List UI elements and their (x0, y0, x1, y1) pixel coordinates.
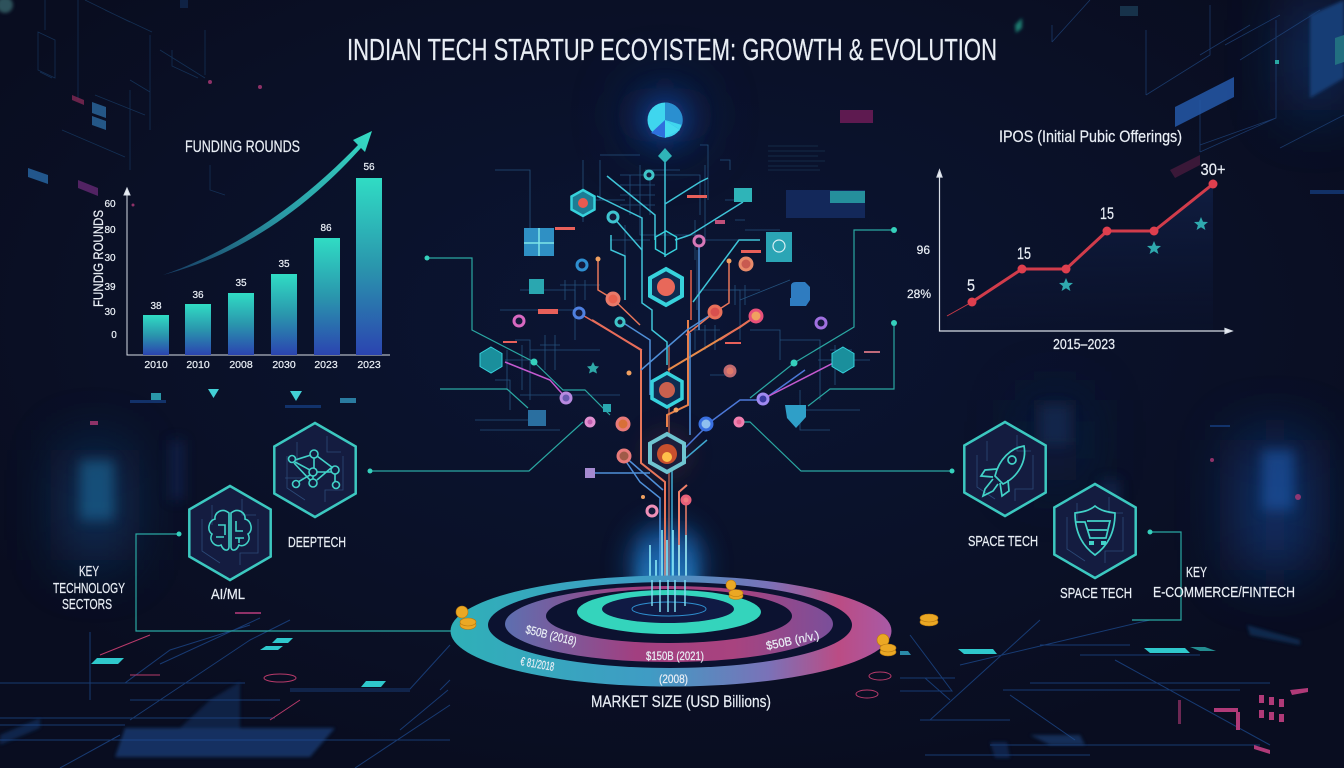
label Space Tech: SPACE TECH (968, 533, 1038, 550)
inner teal ring (577, 590, 761, 634)
IPO y ticks (907, 243, 931, 301)
ring values (524, 622, 820, 663)
panel: market size rings (450, 576, 938, 711)
panel: sector Space Tech (964, 422, 1046, 550)
label AI/ML: AI/ML (211, 586, 245, 603)
funding y ticks: 0 (111, 330, 117, 341)
funding years: 2010 (144, 359, 168, 371)
tree small labels (503, 195, 880, 353)
hexagon rocket (964, 422, 1046, 516)
IPO line (947, 180, 1218, 316)
funding years: 2023 (314, 359, 338, 371)
coin stacks (456, 580, 938, 656)
hexagon DeepTech (274, 423, 356, 517)
funding bar values: 36 (192, 290, 204, 301)
tree square icons (524, 110, 873, 478)
tree hexagons (480, 190, 854, 472)
IPO values: 15 (1100, 204, 1114, 223)
outer ring values: (2008) (659, 672, 688, 686)
funding y ticks: 30 (104, 307, 116, 318)
icon: diamond (658, 148, 672, 163)
side specks (90, 80, 1301, 614)
IPO x label: 2015–2023 (1053, 336, 1115, 353)
funding y ticks: 30 (104, 253, 116, 264)
label: key technology sectors: TECHNOLOGY (53, 580, 125, 597)
panel: circuit tree (136, 98, 1181, 631)
tree trunk lines (505, 245, 843, 600)
connector dots (176, 227, 1152, 536)
label: key e-commerce/fintech: KEY (1186, 564, 1207, 581)
IPO values: 30+ (1200, 160, 1226, 179)
funding years (144, 359, 381, 371)
label: key technology sectors (53, 563, 125, 613)
funding bar values: 56 (363, 162, 375, 173)
outer gap (488, 582, 852, 668)
IPO heading: IPOS (Initial Pubic Offerings) (999, 127, 1182, 146)
IPO values: 5 (967, 276, 975, 295)
IPO values: 15 (1017, 244, 1031, 263)
label DeepTech: DEEPTECH (288, 534, 346, 551)
panel: IPO chart (907, 127, 1232, 353)
label: key e-commerce/fintech: E-COMMERCE/FINTECH (1153, 584, 1295, 601)
outer ring values: € 81/2018 (519, 654, 556, 674)
floor blue haze (0, 625, 1300, 758)
IPO y ticks: 96 (917, 243, 930, 257)
IPO y ticks: 28% (907, 287, 931, 301)
label: key e-commerce/fintech (1153, 564, 1295, 601)
funding y label: FUNDIG ROUNDS (90, 210, 106, 307)
label: key technology sectors: KEY (79, 563, 99, 580)
ring values: $50B (n/v.) (765, 628, 820, 653)
funding years: 2008 (229, 359, 253, 371)
top-right background circuit (1052, 0, 1344, 152)
IPO axes (937, 170, 1232, 334)
top-left background circuit (38, 0, 225, 195)
ring beams (652, 580, 685, 612)
panel: sector DeepTech (274, 423, 356, 551)
label second Space Tech: SPACE TECH (1060, 585, 1132, 602)
perspective floor lines (0, 618, 1270, 768)
tree connectors (136, 230, 1181, 631)
ring centre (602, 595, 734, 623)
market size label: MARKET SIZE (USD Billions) (591, 692, 771, 711)
floor magenta accents (1178, 688, 1308, 754)
floor teal tiles (91, 638, 1216, 687)
funding y ticks: 80 (104, 225, 116, 236)
funding years: 2010 (186, 359, 210, 371)
funding bar values: 38 (150, 301, 162, 312)
panel: sector E-commerce (1054, 484, 1136, 602)
tree small dots (596, 256, 732, 499)
IPO area (947, 184, 1213, 330)
title: INDIAN TECH STARTUP ECOYISTEM: GROWTH & EVOLUTION (347, 32, 997, 67)
outer ring (450, 576, 892, 686)
ring values: $150B (2021) (646, 649, 704, 663)
IPO stars (1059, 217, 1208, 291)
funding years: 2023 (357, 359, 381, 371)
tree teal branches (597, 160, 760, 365)
trunk light beam (636, 525, 698, 610)
hexagon AI/ML (189, 486, 271, 580)
funding y ticks (104, 199, 117, 341)
label: key technology sectors: SECTORS (62, 596, 112, 613)
funding y ticks: 60 (104, 199, 116, 210)
outer ring values (519, 654, 688, 686)
tree ring nodes (514, 171, 826, 516)
icon: top pie (648, 102, 683, 138)
fine circuit texture (475, 145, 870, 430)
funding axes (124, 188, 390, 355)
funding bar values: 35 (278, 259, 290, 270)
hexagon shield cart (1054, 484, 1136, 578)
funding y ticks: 39 (104, 282, 116, 293)
icon: down markers (151, 389, 356, 403)
funding chart heading: FUNDING ROUNDS (185, 137, 300, 156)
funding bars (143, 178, 382, 355)
funding years: 2030 (272, 359, 296, 371)
funding bar values (150, 162, 375, 312)
IPO values (967, 160, 1226, 295)
panel: funding rounds chart (90, 131, 390, 371)
ring values: $50B (2018) (524, 622, 578, 648)
inner gap (546, 589, 792, 643)
panel: sector AI/ML (189, 486, 271, 603)
funding growth arrow (163, 131, 372, 275)
tree glow (631, 98, 703, 605)
middle ring (505, 586, 833, 662)
funding bar values: 86 (320, 223, 332, 234)
funding bar values: 35 (235, 278, 247, 289)
